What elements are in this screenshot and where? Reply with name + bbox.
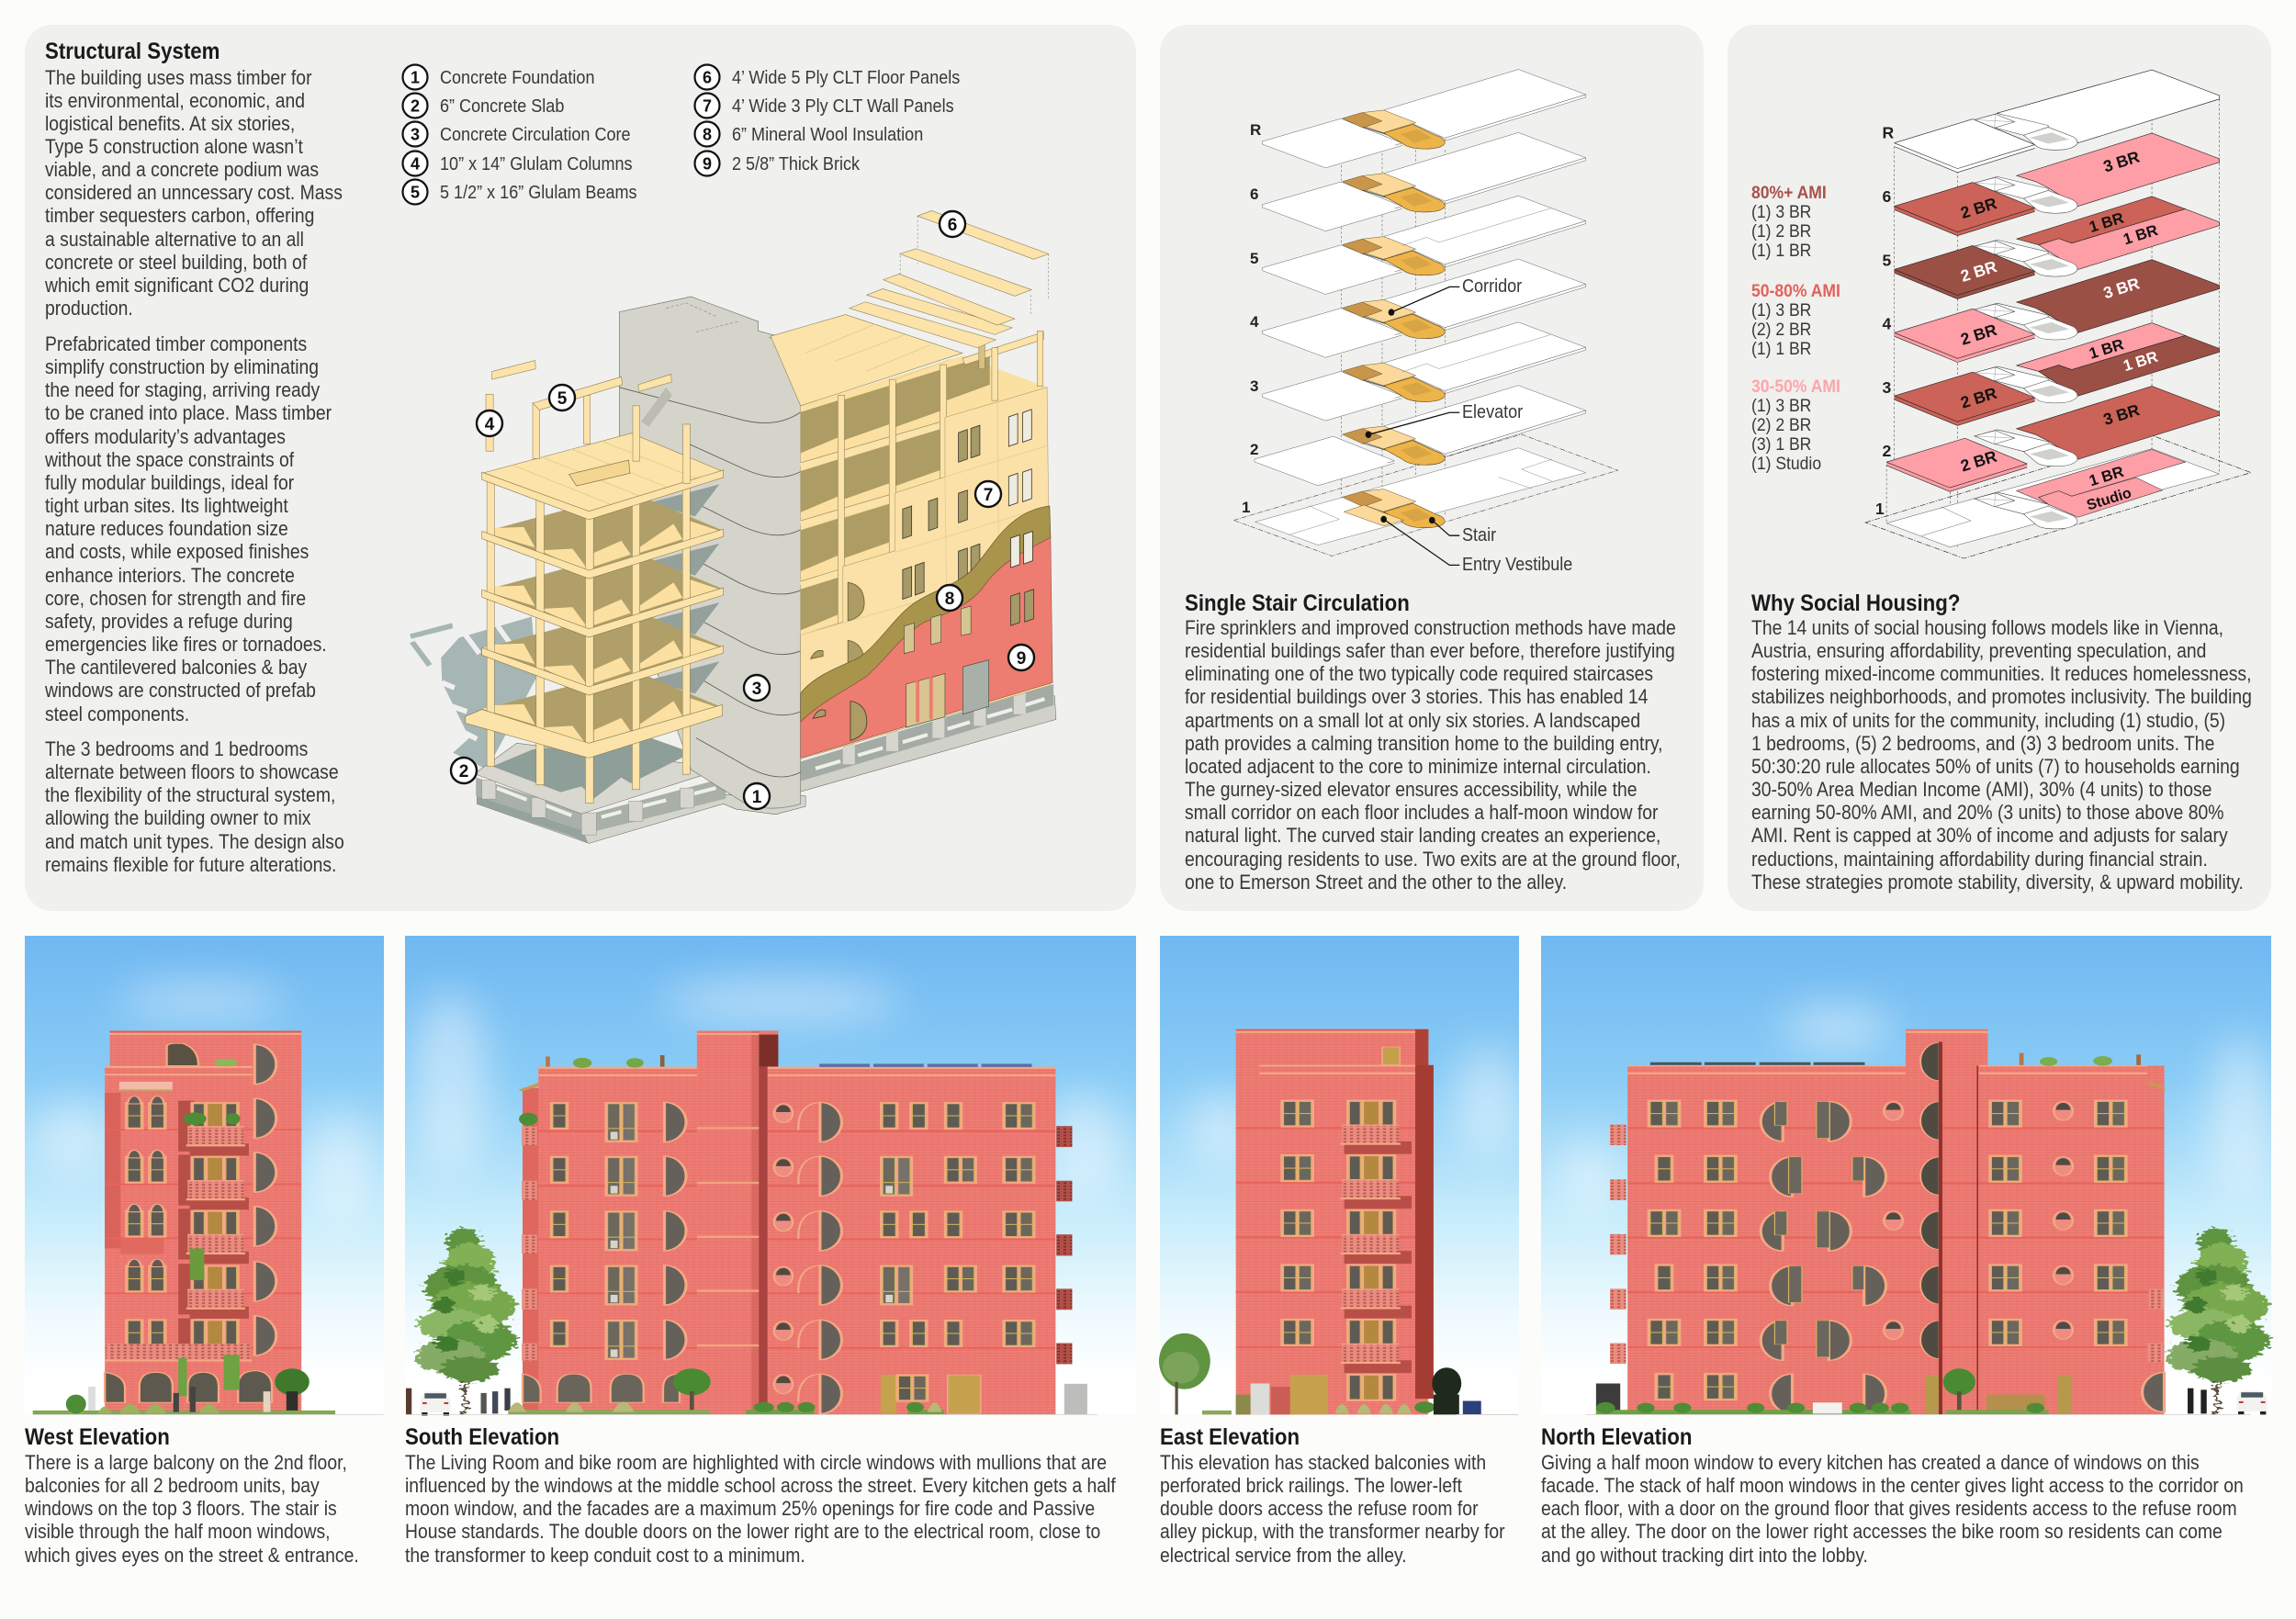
- panel: why social housing background: [1728, 25, 2271, 911]
- legend number badges: 8: [703, 125, 712, 143]
- text: east elevation caption: perforated brick railings. The lower-left: [1160, 1474, 1462, 1497]
- level 5 plate: [1262, 196, 1586, 294]
- legend: 50-80% AMI: 50-80% AMI: [1751, 281, 1840, 301]
- text: structural system paragraph 2: offers modularity’s advantages: [45, 425, 286, 448]
- text: east elevation caption: electrical service from the alley.: [1160, 1544, 1407, 1567]
- text: why social housing body: earning 50-80% AMI, and 20% (3 units) to those above 80%: [1751, 801, 2223, 824]
- numbered callouts on axonometric: 6: [948, 216, 957, 235]
- text: structural system paragraph 2: windows are constructed of prefab: [45, 679, 316, 702]
- leader: entry vestibule: [1380, 516, 1459, 565]
- legend number badges: 7: [703, 97, 712, 116]
- text: why social housing body: fostering mixed-income communities. It reduces homelessness,: [1751, 662, 2251, 685]
- text: north elevation caption: facade. The stack of half moon windows in the center gives light access to the corridor on: [1541, 1474, 2244, 1497]
- level 4 units: 2 BR: [1958, 320, 1999, 349]
- label: entry vestibule: Entry Vestibule: [1462, 554, 1572, 575]
- legend: 30-50% AMI: (1) Studio: [1751, 454, 1821, 474]
- text: structural system paragraph 2: to be craned into place. Mass timber: [45, 401, 332, 424]
- timber frame and CLT wall, right wing: [771, 315, 1051, 759]
- text: structural system paragraph 2: and costs, while exposed finishes: [45, 540, 309, 563]
- legend: 80%+ AMI: (1) 2 BR: [1751, 221, 1811, 242]
- level 6 units: 2 BR: [1958, 194, 1999, 222]
- west elevation rendering: [25, 936, 384, 1415]
- level 4 plate: [1262, 259, 1586, 357]
- text: structural system paragraph 2: core, chosen for strength and fire: [45, 587, 306, 610]
- circulation floor labels: 4: [1250, 313, 1259, 331]
- level 3 units: [1895, 323, 2220, 425]
- heading: south elevation: South Elevation: [405, 1424, 559, 1450]
- text: structural system paragraph 2: Prefabricated timber components: [45, 332, 307, 355]
- legend number badges: [402, 64, 720, 204]
- text: east elevation caption: alley pickup, with the transformer nearby for: [1160, 1520, 1505, 1543]
- text: structural system paragraph 2: nature reduces foundation size: [45, 517, 288, 540]
- text: single stair circulation body: apartments on a small lot at only six stories. A landscaped: [1185, 709, 1640, 732]
- level 6 plate: [1262, 132, 1586, 231]
- level 2 units: 3 BR: [2101, 400, 2142, 429]
- text: structural system paragraph 1: considered an unncessary cost. Mass: [45, 181, 343, 204]
- legend: 80%+ AMI: 80%+ AMI: [1751, 183, 1827, 203]
- text: south elevation caption: moon window, and the facades are a maximum 25% openings for fire code and Passive: [405, 1497, 1095, 1520]
- unit diagram floor labels: [1875, 123, 1895, 518]
- text: structural system paragraph 2: simplify construction by eliminating: [45, 355, 319, 378]
- legend: building components 6-9: 4’ Wide 3 Ply CLT Wall Panels: [732, 96, 954, 117]
- text: west elevation caption: balconies for all 2 bedroom units, bay: [25, 1474, 320, 1497]
- text: structural system paragraph 3: [45, 737, 344, 876]
- numbered callouts on axonometric: 3: [752, 680, 761, 699]
- legend: 30-50% AMI: (1) 3 BR: [1751, 396, 1811, 416]
- level 4 units: [1895, 260, 2220, 362]
- numbered callouts on axonometric: 2: [459, 762, 468, 781]
- level 3 units: 2 BR: [1958, 384, 1999, 412]
- heading: north elevation: North Elevation: [1541, 1424, 1692, 1450]
- numbered callouts on axonometric: [451, 211, 1034, 809]
- numbered callouts on axonometric: 9: [1017, 649, 1026, 669]
- text: single stair circulation body: The gurney-sized elevator ensures accessibility, while the: [1185, 778, 1637, 801]
- level 3 units: 1 BR: [2088, 335, 2126, 363]
- label: corridor: Corridor: [1462, 275, 1522, 297]
- south elevation rendering: [405, 936, 1136, 1415]
- text: why social housing body: 50:30:20 rule allocates 50% of units (7) to households earning: [1751, 755, 2240, 778]
- text: single stair circulation body: natural light. The curved stair landing creates an experience,: [1185, 824, 1660, 847]
- ground floor units: [1865, 435, 2251, 558]
- legend number badges: 9: [703, 154, 712, 173]
- text: structural system paragraph 2: the need for staging, arriving ready: [45, 378, 320, 401]
- legend number badges: 1: [411, 68, 420, 86]
- unit diagram floor labels: 4: [1883, 315, 1892, 333]
- legend: building components 6-9: [732, 67, 960, 174]
- numbered callouts on axonometric: 4: [485, 415, 495, 434]
- text: single stair circulation body: located adjacent to the core to minimize internal circulation.: [1185, 755, 1651, 778]
- text: structural system paragraph 1: production.: [45, 297, 133, 320]
- roof plate: [1895, 70, 2220, 173]
- text: north elevation caption: [1541, 1451, 2244, 1567]
- leader: stair: [1429, 517, 1459, 535]
- legend: building components 6-9: 2 5/8” Thick Brick: [732, 153, 860, 174]
- text: structural system paragraph 1: timber sequesters carbon, offering: [45, 204, 314, 227]
- east elevation rendering: [1159, 936, 1520, 1415]
- legend: 50-80% AMI: (2) 2 BR: [1751, 320, 1811, 340]
- leader: corridor: [1389, 287, 1459, 316]
- circulation floor labels: 3: [1250, 377, 1258, 395]
- timber frame left wing: [466, 360, 724, 804]
- legend: building components 6-9: 4’ Wide 5 Ply CLT Floor Panels: [732, 67, 960, 88]
- text: south elevation caption: House standards. The double doors on the lower right are to the electrical room, close to: [405, 1520, 1100, 1543]
- text: why social housing body: Austria, ensuring affordability, preventing speculation, and: [1751, 639, 2206, 662]
- text: structural system paragraph 3: The 3 bedrooms and 1 bedrooms: [45, 737, 308, 760]
- level 3 units: 1 BR: [2122, 348, 2160, 375]
- text: structural system paragraph 2: steel components.: [45, 702, 189, 725]
- legend: building components 1-5: Concrete Circulation Core: [440, 124, 631, 145]
- level 3 plate: [1262, 322, 1586, 421]
- unit diagram floor labels: R: [1883, 123, 1895, 141]
- circulation floor labels: 1: [1242, 499, 1250, 516]
- unit diagram floor labels: 6: [1883, 187, 1892, 206]
- text: structural system paragraph 1: Type 5 construction alone wasn’t: [45, 135, 303, 158]
- axonometric structural diagram: [410, 210, 1056, 843]
- unit diagram floor labels: 1: [1875, 500, 1885, 518]
- level 5 units: 1 BR: [2122, 221, 2160, 248]
- panel: structural system background: [25, 25, 1136, 911]
- text: south elevation caption: The Living Room and bike room are highlighted with circle windows with mullions that are: [405, 1451, 1107, 1474]
- legend: 30-50% AMI: [1751, 377, 1840, 474]
- leader: elevator: [1366, 412, 1459, 438]
- text: structural system paragraph 3: the flexibility of the structural system,: [45, 783, 335, 806]
- text: structural system paragraph 3: and match unit types. The design also: [45, 830, 344, 853]
- numbered callouts on axonometric: 7: [984, 486, 993, 505]
- heading: west elevation: West Elevation: [25, 1424, 170, 1450]
- label: elevator: Elevator: [1462, 401, 1523, 422]
- text: structural system paragraph 1: The building uses mass timber for: [45, 66, 312, 88]
- text: structural system paragraph 2: emergencies like fires or tornadoes.: [45, 633, 327, 656]
- legend number badges: 3: [411, 125, 420, 143]
- text: structural system paragraph 1: viable, and a concrete podium was: [45, 158, 319, 181]
- unit diagram floor labels: 5: [1883, 252, 1892, 270]
- text: single stair circulation body: Fire sprinklers and improved construction methods have made: [1185, 616, 1676, 639]
- text: structural system paragraph 2: fully modular buildings, ideal for: [45, 471, 294, 494]
- text: south elevation caption: the transformer to keep conduit cost to a minimum.: [405, 1544, 805, 1567]
- text: structural system paragraph 2: [45, 332, 332, 725]
- text: why social housing body: stabilizes neighborhoods, and promotes inclusivity. The building: [1751, 685, 2252, 708]
- text: single stair circulation body: [1185, 616, 1681, 894]
- legend: building components 1-5: 6” Concrete Slab: [440, 96, 564, 117]
- text: structural system paragraph 2: without the space constraints of: [45, 448, 294, 471]
- text: west elevation caption: which gives eyes on the street & entrance.: [25, 1544, 359, 1567]
- text: single stair circulation body: one to Emerson Street and the other to the alley.: [1185, 871, 1567, 894]
- text: why social housing body: 30-50% Area Median Income (AMI), 30% (4 units) to those: [1751, 778, 2212, 801]
- text: why social housing body: AMI. Rent is capped at 30% of income and adjusts for salary: [1751, 824, 2228, 847]
- exploded circulation diagram: [1233, 70, 1618, 565]
- text: structural system paragraph 3: allowing the building owner to mix: [45, 806, 310, 829]
- unit diagram floor labels: 3: [1883, 378, 1892, 397]
- text: why social housing body: 1 bedrooms, (5) 2 bedrooms, and (3) 3 bedroom units. The: [1751, 732, 2214, 755]
- text: structural system paragraph 1: a sustainable alternative to an all: [45, 228, 304, 251]
- text: single stair circulation body: path provides a calming transition home to the building entry,: [1185, 732, 1663, 755]
- circulation floor labels: R: [1250, 121, 1261, 139]
- text: south elevation caption: [405, 1451, 1116, 1567]
- heading: why social housing: Why Social Housing?: [1751, 590, 1960, 616]
- legend: 30-50% AMI: 30-50% AMI: [1751, 377, 1840, 397]
- exploded CLT floor panels: [850, 210, 1049, 348]
- legend: building components 1-5: [440, 67, 637, 203]
- text: structural system paragraph 1: logistical benefits. At six stories,: [45, 112, 295, 135]
- text: single stair circulation body: small corridor on each floor includes a half-moon window for: [1185, 801, 1658, 824]
- legend: 50-80% AMI: [1751, 281, 1840, 359]
- text: single stair circulation body: encouraging residents to use. Two exits are at the ground floor,: [1185, 848, 1681, 871]
- text: single stair circulation body: eliminating one of the two typically code required staircases: [1185, 662, 1653, 685]
- unit diagram floor labels: 2: [1883, 442, 1892, 460]
- text: east elevation caption: double doors access the refuse room for: [1160, 1497, 1479, 1520]
- north elevation rendering: [1541, 936, 2273, 1415]
- panel: single stair circulation background: [1160, 25, 1704, 911]
- text: north elevation caption: and go without tracking dirt into the lobby.: [1541, 1544, 1868, 1567]
- text: east elevation caption: This elevation has stacked balconies with: [1160, 1451, 1486, 1474]
- text: structural system paragraph 3: remains flexible for future alterations.: [45, 853, 336, 876]
- legend number badges: 2: [411, 97, 420, 116]
- legend: 50-80% AMI: (1) 3 BR: [1751, 300, 1811, 320]
- text: structural system paragraph 1: its environmental, economic, and: [45, 89, 305, 112]
- circulation floor labels: [1242, 121, 1261, 516]
- legend number badges: 5: [411, 184, 420, 202]
- level 2 units: [1886, 387, 2220, 491]
- text: north elevation caption: each floor, with a door on the ground floor that gives residents access to the refuse room: [1541, 1497, 2237, 1520]
- legend: 80%+ AMI: (1) 3 BR: [1751, 202, 1811, 222]
- label: stair: Stair: [1462, 524, 1496, 545]
- level 5 units: 2 BR: [1958, 257, 1999, 286]
- text: south elevation caption: influenced by the windows at the middle school across the street. Every kitchen gets a half: [405, 1474, 1116, 1497]
- level 5 units: [1895, 197, 2220, 299]
- text: structural system paragraph 2: safety, provides a refuge during: [45, 610, 293, 633]
- text: single stair circulation body: residential buildings safer than ever before, therefore justifying: [1185, 639, 1675, 662]
- ground floor units: 1 BR: [2088, 463, 2126, 489]
- numbered callouts on axonometric: 8: [945, 590, 954, 609]
- text: why social housing body: has a mix of units for the community, including (1) studio, (5): [1751, 709, 2225, 732]
- legend: 50-80% AMI: (1) 1 BR: [1751, 339, 1811, 359]
- numbered callouts on axonometric: 5: [557, 389, 568, 409]
- numbered callouts on axonometric: 1: [752, 788, 762, 807]
- text: north elevation caption: Giving a half moon window to every kitchen has created a dance of windows on this: [1541, 1451, 2200, 1474]
- legend: building components 1-5: Concrete Foundation: [440, 67, 594, 88]
- legend: 30-50% AMI: (2) 2 BR: [1751, 415, 1811, 435]
- ground shadow of timber frame: [410, 617, 536, 770]
- ground floor units: Studio: [2085, 485, 2133, 513]
- level 5 units: 1 BR: [2088, 209, 2126, 236]
- level 2 units: 2 BR: [1958, 447, 1999, 475]
- circulation floor labels: 6: [1250, 186, 1258, 203]
- brick veneer layer: [801, 532, 1052, 758]
- text: why social housing body: These strategies promote stability, diversity, & upward mobility.: [1751, 871, 2244, 894]
- concrete circulation core: [619, 297, 801, 808]
- text: west elevation caption: visible through the half moon windows,: [25, 1520, 331, 1543]
- text: north elevation caption: at the alley. The door on the lower right accesses the bike room so residents can come: [1541, 1520, 2223, 1543]
- level 6 units: 3 BR: [2101, 147, 2142, 175]
- text: west elevation caption: [25, 1451, 359, 1567]
- text: structural system paragraph 2: tight urban sites. Its lightweight: [45, 494, 288, 517]
- text: why social housing body: reductions, maintaining affordability during financial strain.: [1751, 848, 2208, 871]
- roof plate: [1262, 70, 1586, 168]
- text: structural system paragraph 2: The cantilevered balconies & bay: [45, 656, 307, 679]
- heading: structural system: Structural System: [45, 39, 219, 64]
- heading: single stair circulation: Single Stair Circulation: [1185, 590, 1410, 616]
- ground floor plate: [1233, 434, 1618, 556]
- circulation floor labels: 5: [1250, 250, 1258, 267]
- text: single stair circulation body: for residential buildings over 3 stories. This has enabled 14: [1185, 685, 1648, 708]
- text: structural system paragraph 1: which emit significant CO2 during: [45, 274, 309, 297]
- exploded unit mix diagram: [1865, 70, 2251, 558]
- legend: 80%+ AMI: (1) 1 BR: [1751, 241, 1811, 261]
- legend: building components 1-5: 10” x 14” Glulam Columns: [440, 153, 633, 174]
- concrete foundation, left wing: [475, 737, 805, 843]
- mineral wool insulation layer: [801, 506, 1051, 722]
- level 4 units: 3 BR: [2101, 274, 2142, 302]
- legend number badges: 6: [703, 68, 712, 86]
- level 2 plate: [1255, 386, 1586, 486]
- legend: building components 6-9: 6” Mineral Wool Insulation: [732, 124, 923, 145]
- level 6 units: [1895, 133, 2220, 236]
- legend: 80%+ AMI: [1751, 183, 1827, 261]
- text: structural system paragraph 1: concrete or steel building, both of: [45, 251, 307, 274]
- circulation floor labels: 2: [1250, 441, 1258, 458]
- legend: building components 1-5: 5 1/2” x 16” Glulam Beams: [440, 182, 637, 203]
- text: why social housing body: The 14 units of social housing follows models like in Vienna,: [1751, 616, 2223, 639]
- legend number badges: 4: [411, 154, 420, 173]
- legend: 30-50% AMI: (3) 1 BR: [1751, 434, 1811, 455]
- heading: east elevation: East Elevation: [1160, 1424, 1300, 1450]
- concrete foundation, right wing: [801, 684, 1056, 792]
- text: east elevation caption: [1160, 1451, 1505, 1567]
- text: structural system paragraph 3: alternate between floors to showcase: [45, 760, 339, 783]
- text: structural system paragraph 1: [45, 66, 343, 320]
- text: west elevation caption: There is a large balcony on the 2nd floor,: [25, 1451, 347, 1474]
- text: why social housing body: [1751, 616, 2252, 894]
- text: structural system paragraph 2: enhance interiors. The concrete: [45, 564, 295, 587]
- text: west elevation caption: windows on the top 3 floors. The stair is: [25, 1497, 337, 1520]
